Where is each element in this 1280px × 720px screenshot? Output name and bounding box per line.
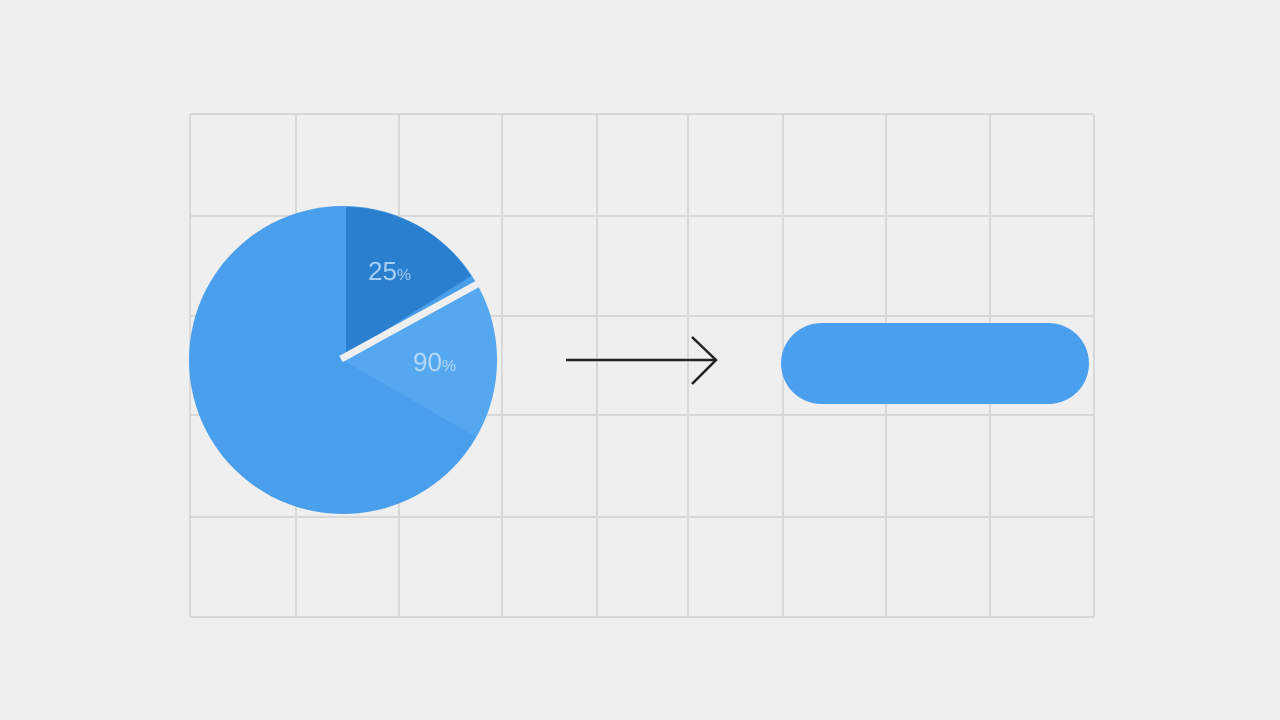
slice: 90%	[343, 287, 497, 437]
pie chart	[189, 206, 497, 514]
slice: 90%: 90%	[413, 347, 456, 377]
slice: 25%	[346, 207, 471, 355]
bar pill	[781, 323, 1089, 404]
arrow	[566, 337, 716, 384]
slice: 25%: 25%	[368, 256, 411, 286]
